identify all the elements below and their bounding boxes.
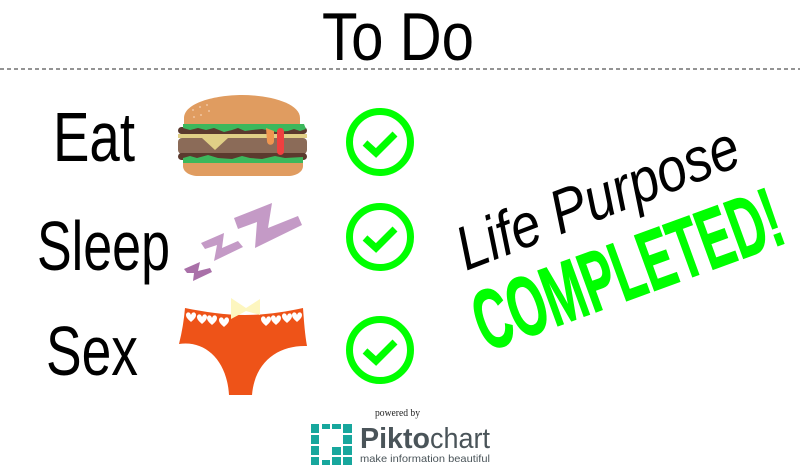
icon: burger — [178, 95, 307, 176]
text: Life Purpose: Life Purpose — [446, 113, 749, 284]
logo: Piktochart — [311, 423, 490, 465]
icon: zzz — [184, 203, 302, 281]
logo mark — [311, 424, 352, 465]
icon: underwear — [179, 298, 307, 395]
powered by: powered by — [375, 408, 420, 419]
label: Eat: Eat — [53, 98, 135, 176]
tagline: make information beautiful — [360, 453, 490, 465]
wordmark: Pikto — [360, 423, 430, 455]
check: eat — [350, 112, 410, 172]
check: sleep — [350, 206, 410, 268]
label: Sleep: Sleep — [37, 207, 170, 285]
title: To Do — [322, 0, 474, 75]
check: sex — [350, 320, 410, 380]
logo: Piktochart: chart — [430, 423, 490, 455]
label: Sex: Sex — [46, 312, 138, 390]
